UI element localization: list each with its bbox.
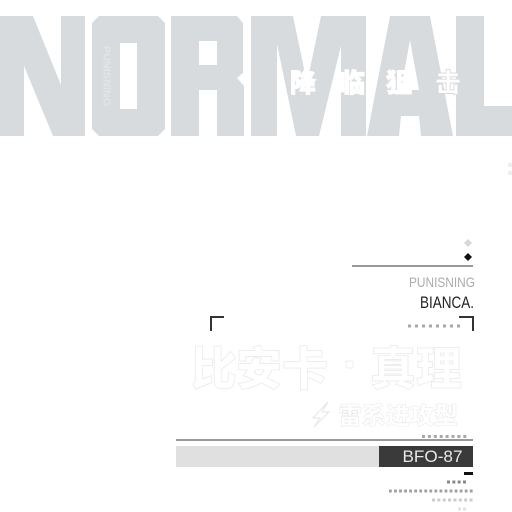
name: 比安卡·真理: 安 <box>236 343 282 395</box>
icon: lightning bolt <box>313 402 329 427</box>
type: 雷系进攻型: 系 <box>362 402 386 430</box>
icon: diamonds <box>464 239 472 261</box>
corner bracket right <box>459 317 473 331</box>
title: NORMAL <box>0 16 512 136</box>
id: BFO-87: BFO-87 <box>402 448 462 466</box>
name: 比安卡·真理: 理 <box>416 343 462 395</box>
name: 比安卡·真理: 卡 <box>282 343 328 395</box>
subtitle: 降临狙击: 降 <box>290 68 316 98</box>
subtitle: 降临狙击: 击 <box>435 68 461 98</box>
name: 比安卡·真理 <box>191 343 462 395</box>
name: 比安卡·真理: 真 <box>370 343 416 395</box>
name: 比安卡·真理: 比 <box>191 343 237 395</box>
type: 雷系进攻型 <box>338 402 458 430</box>
dotted row <box>408 324 461 328</box>
dotted row <box>422 435 467 438</box>
divider line <box>352 265 473 267</box>
corner bracket left <box>211 317 224 331</box>
type: 雷系进攻型: 进 <box>386 403 410 430</box>
id bar <box>176 446 473 467</box>
type: 雷系进攻型: 型 <box>434 403 458 430</box>
black dash <box>464 472 473 475</box>
type: 雷系进攻型: 攻 <box>410 403 434 430</box>
label: PUNISNING: PUNISNING <box>409 274 475 290</box>
subtitle: 降临狙击 <box>290 68 461 98</box>
subtitle: 降临狙击: 狙 <box>386 68 412 98</box>
type: 雷系进攻型: 雷 <box>338 403 362 430</box>
edge dots <box>508 163 512 175</box>
subtitle: 降临狙击: 临 <box>339 68 365 98</box>
name: BIANCA.: BIANCA. <box>420 294 474 312</box>
vertical label: PUNISNING: PUNISNING <box>100 46 112 106</box>
divider line <box>176 439 473 441</box>
dotted rows <box>389 482 473 509</box>
